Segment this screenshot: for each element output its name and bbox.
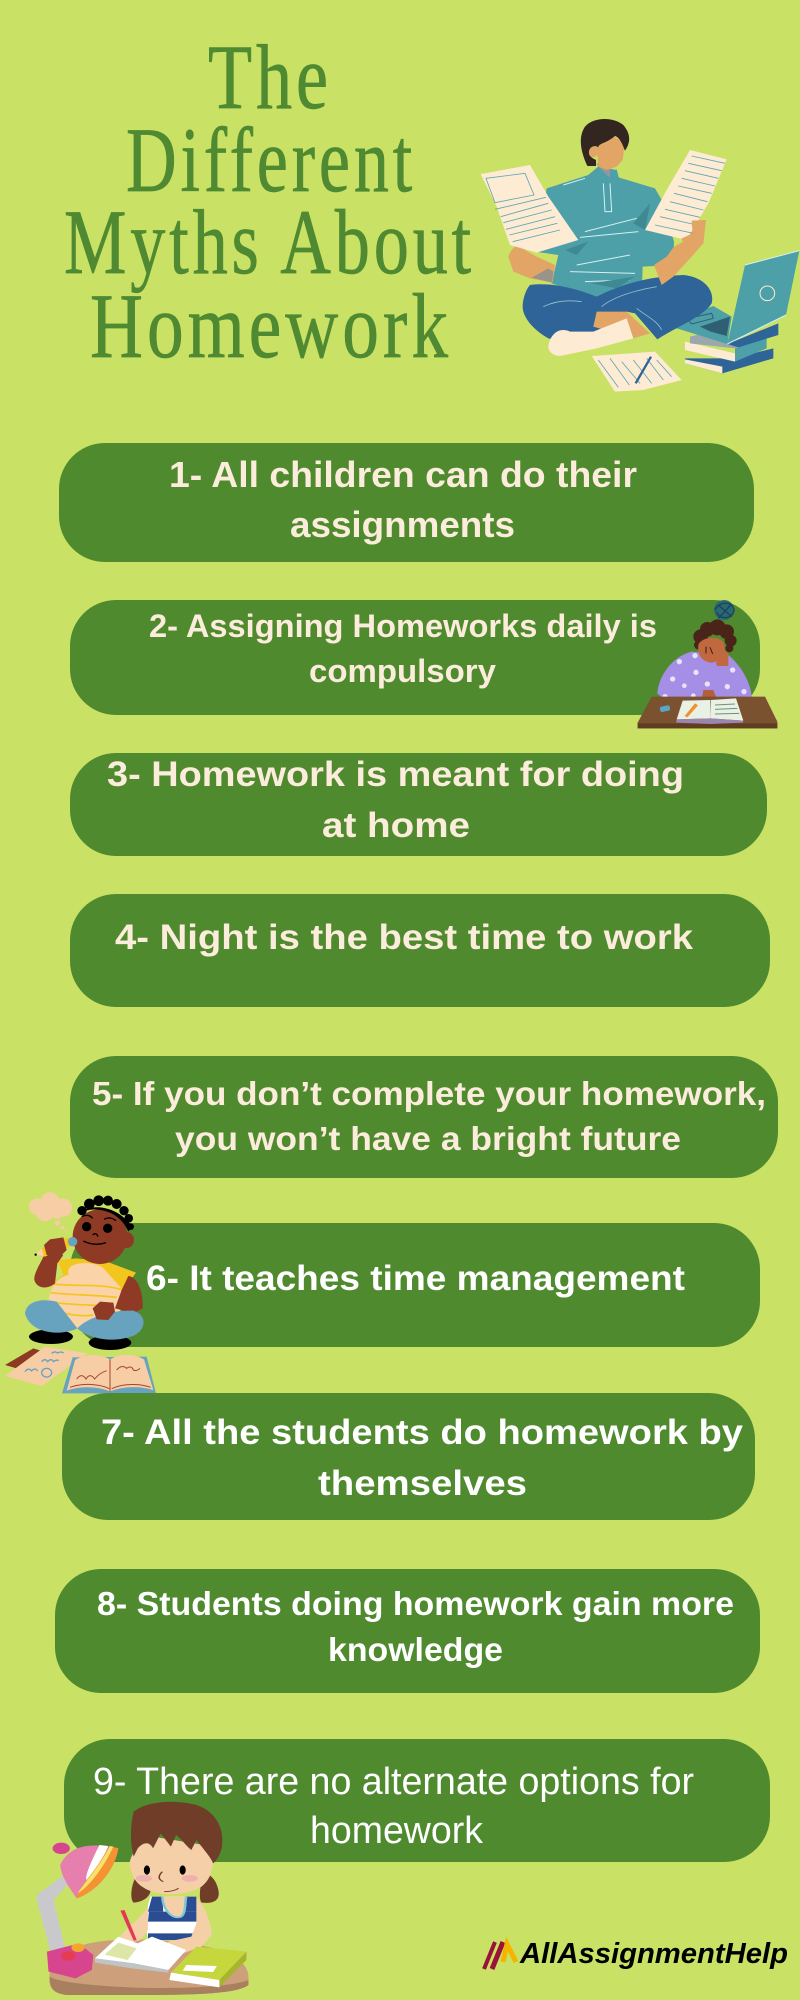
myth 8: 8- Students doing homework gain more xyxy=(97,1585,734,1622)
face xyxy=(130,1837,212,1894)
myth 6 xyxy=(70,1223,760,1347)
illustration: man reading papers with laptop and books xyxy=(481,119,799,392)
sweater xyxy=(657,652,752,702)
green notebook xyxy=(171,1947,246,1980)
title: Homework xyxy=(90,275,452,377)
knee hand xyxy=(93,1302,115,1320)
book and pencil xyxy=(676,698,743,724)
left hand and arm xyxy=(508,244,555,283)
myth 1: 1- All children can do their xyxy=(169,454,637,495)
open book xyxy=(62,1355,156,1393)
myth 9: 9- There are no alternate options for xyxy=(93,1761,694,1803)
myth 2: 2- Assigning Homeworks daily is xyxy=(149,608,657,644)
desk xyxy=(638,697,777,728)
arms xyxy=(34,1250,63,1287)
laptop xyxy=(663,251,799,347)
myth 8: knowledge xyxy=(328,1631,503,1668)
scribble cloud xyxy=(714,600,734,620)
right paper xyxy=(645,150,727,240)
myth 3 xyxy=(70,753,767,856)
title: The xyxy=(208,26,332,128)
myth 2: compulsory xyxy=(309,653,496,689)
hair xyxy=(131,1802,222,1863)
myth 2 xyxy=(70,600,760,715)
head xyxy=(68,1195,134,1264)
hand on desk xyxy=(702,690,717,699)
title: Myths About xyxy=(64,191,475,293)
book stack xyxy=(685,333,773,373)
illustration: tired student at desk xyxy=(638,600,777,728)
myth 5: you won’t have a bright future xyxy=(175,1120,681,1157)
myth 7 xyxy=(62,1393,755,1520)
myth 8 xyxy=(55,1569,760,1693)
torso xyxy=(48,1258,136,1328)
title xyxy=(64,26,475,377)
body xyxy=(146,1897,198,1940)
lamp xyxy=(37,1843,118,1978)
myth 7: themselves xyxy=(318,1464,527,1503)
crossed legs xyxy=(523,275,712,339)
head and hair xyxy=(581,119,629,182)
logo: AllAssignmentHelp: AllAssignmentHelp xyxy=(519,1938,788,1970)
myth 9 xyxy=(64,1739,770,1862)
myth 5: 5- If you don’t complete your homework, xyxy=(92,1075,766,1112)
pigtails xyxy=(131,1875,151,1903)
myth 6: 6- It teaches time management xyxy=(146,1259,685,1298)
right fingers xyxy=(682,220,706,244)
myth 1: assignments xyxy=(290,504,515,545)
title: Different xyxy=(126,109,416,211)
illustration: girl writing at desk with lamp xyxy=(37,1802,248,1995)
myth 3: 3- Homework is meant for doing xyxy=(107,755,684,794)
myth 7: 7- All the students do homework by xyxy=(101,1413,744,1452)
floor paper and pen xyxy=(592,352,682,392)
pencil xyxy=(120,1910,137,1941)
book xyxy=(95,1937,186,1970)
illustration: boy thinking with pencil xyxy=(5,1192,156,1393)
myth 4: 4- Night is the best time to work xyxy=(115,918,694,957)
papers xyxy=(5,1347,87,1386)
shoes xyxy=(29,1329,73,1344)
myth 1 xyxy=(59,443,754,562)
left paper xyxy=(481,165,578,253)
foot and sock xyxy=(593,312,650,338)
desk xyxy=(49,1939,248,1995)
hand and pencil xyxy=(34,1237,73,1258)
eraser xyxy=(660,705,670,712)
right arm xyxy=(654,220,705,285)
myth 9: homework xyxy=(310,1810,484,1852)
myth 4 xyxy=(70,894,770,1007)
thought bubble xyxy=(29,1192,72,1231)
shirt xyxy=(535,167,674,297)
legs xyxy=(25,1300,77,1333)
head and curls xyxy=(693,619,737,666)
myth 3: at home xyxy=(322,806,470,845)
myth 5 xyxy=(70,1056,778,1178)
logo mark xyxy=(484,1942,516,1969)
